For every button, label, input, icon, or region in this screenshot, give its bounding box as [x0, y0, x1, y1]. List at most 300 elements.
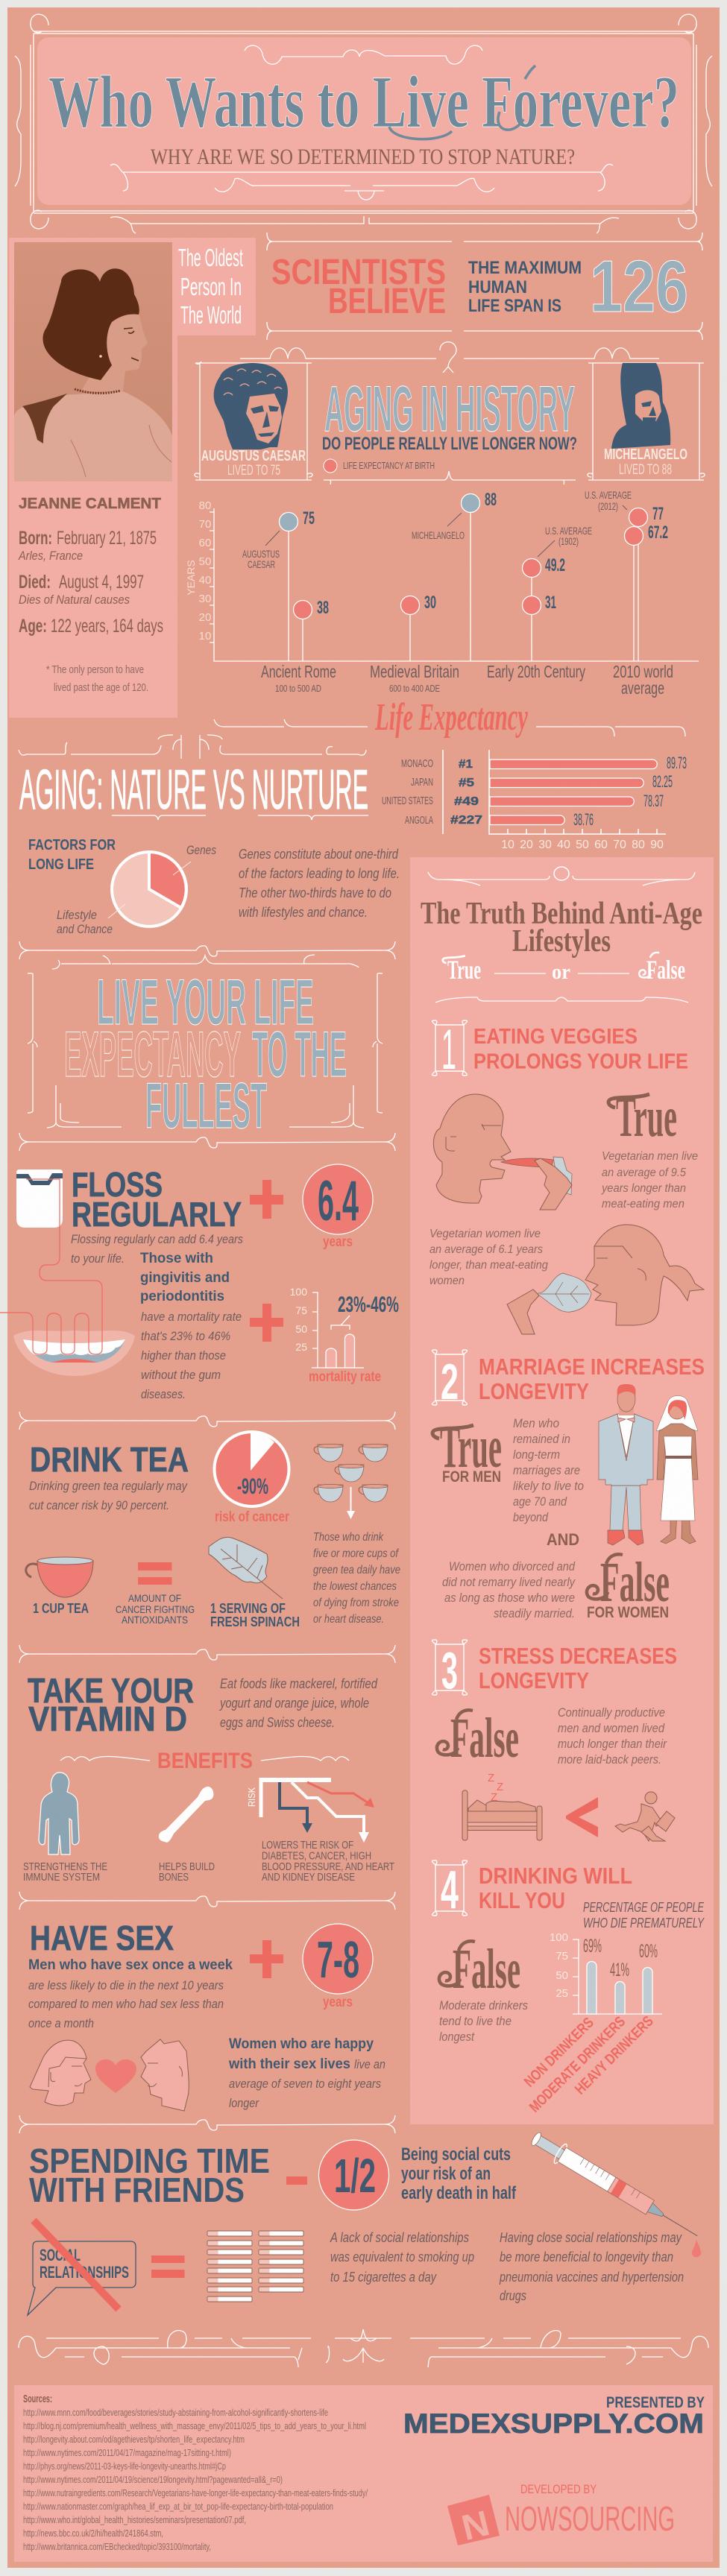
panel: spending time with friends: Being social cuts [401, 2144, 511, 2165]
chart: life expectancy by country: 78.37 [643, 792, 664, 810]
heading: aging in history: DO PEOPLE REALLY LIVE LONGER NOW? [322, 434, 577, 454]
years badge: 7-8 [317, 1931, 359, 1989]
less-than icon [566, 1797, 598, 1837]
claim 1: an average of 9.5 [602, 1167, 686, 1179]
panel: drink tea: DRINK TEA [30, 1440, 189, 1479]
panel: vitamin D: DIABETES, CANCER, HIGH [262, 1850, 371, 1862]
panel: vitamin D: VITAMIN D [28, 1699, 187, 1738]
panel: floss regularly: Those with [140, 1251, 213, 1266]
chart: life expectancy by country: JAPAN [411, 776, 433, 789]
panel: spending time with friends [28, 2128, 703, 2315]
claim 2: FOR WOMEN [587, 1604, 669, 1621]
icon: speech bubble [28, 2220, 136, 2315]
panel: drink tea [26, 1432, 400, 1629]
panel: oldest person [9, 238, 256, 718]
bar chart: drinkers: 69% [583, 1936, 602, 1957]
panel: factors for long life: Lifestyle [57, 908, 97, 922]
panel: drink tea: the lowest chances [313, 1580, 397, 1593]
panel: factors for long life: with lifestyles and chance. [239, 905, 368, 920]
panel: vitamin D: BLOOD PRESSURE, AND HEART [262, 1860, 394, 1873]
legend: LIFE EXPECTANCY AT BIRTH [343, 460, 435, 471]
equals [151, 2255, 185, 2278]
credits: DEVELOPED BY [520, 2482, 597, 2496]
panel: factors for long life: of the factors leading to long life. [239, 866, 400, 881]
panel: Augustus Caesar: LIVED TO 75 [227, 463, 280, 479]
panel: floss regularly: FLOSS [72, 1165, 163, 1204]
panel: drink tea: ANTIOXIDANTS [122, 1614, 188, 1626]
icon: sleeping in bed [462, 1772, 542, 1840]
panel: drink tea: AMOUNT OF [128, 1592, 181, 1604]
panel: vitamin D: eggs and Swiss cheese. [220, 1715, 335, 1730]
icon: bone [159, 1787, 213, 1843]
bar chart: drinkers: 25 [556, 1987, 568, 2000]
facts: Age: [19, 616, 47, 637]
panel: vitamin D: TAKE YOUR [28, 1671, 194, 1710]
icon: sleeping in bed: Z [497, 1781, 503, 1793]
panel: spending time with friends: A lack of social relationships [330, 2230, 469, 2245]
facts [18, 496, 163, 694]
verdict: false [437, 1707, 519, 1770]
text: LIVE YOUR LIFE [97, 967, 314, 1038]
heading: or [552, 961, 570, 984]
chart: life expectancy by country: UNITED STATES [382, 795, 433, 807]
verdict: true for men: True [440, 1415, 502, 1480]
caption: The Oldest [178, 244, 243, 271]
icon: woman eating leaf [507, 1225, 704, 1334]
chart: life expectancy lollipops: 30 [199, 593, 211, 605]
panel: Augustus Caesar [195, 362, 312, 480]
bar chart: drinkers [521, 1931, 662, 2116]
source list: http://www.nutraingredients.com/Research/Vegetarians-have-longer-life-expectancy-than-meat-eaters-finds-study/ [23, 2487, 368, 2498]
panel: floss regularly: higher than those [141, 1348, 226, 1363]
panel: scientists believe: HUMAN [468, 277, 527, 297]
chart: life expectancy lollipops: 20 [199, 611, 211, 624]
claim 3: much longer than their [558, 1737, 667, 1751]
claim 2: 2 [441, 1354, 459, 1410]
half badge: 1/2 [334, 2149, 376, 2203]
panel: drink tea: or heart disease. [313, 1613, 384, 1626]
chart: life expectancy by country: 38.76 [573, 810, 594, 829]
panel: floss regularly: Flossing regularly can add 6.4 years [71, 1232, 243, 1246]
source list [23, 2407, 368, 2552]
panel: drink tea: 1 SERVING OF [210, 1601, 286, 1616]
panel: factors for long life: and Chance [57, 922, 113, 936]
panel: have sex: Women who are happy [229, 2036, 374, 2052]
chart: life expectancy lollipops: 38 [317, 598, 329, 618]
panel: have sex: Men who have sex once a week [28, 1957, 233, 1973]
panel: drink tea: of dying from stroke [313, 1597, 399, 1609]
facts: Born: [19, 528, 52, 549]
chart: life expectancy lollipops: 30 [424, 593, 436, 613]
panel: drink tea: 1 CUP TEA [33, 1601, 89, 1616]
mortality chart: mortality rate [309, 1369, 381, 1385]
panel: floss regularly: diseases. [141, 1387, 186, 1401]
chart: life expectancy lollipops: AUGUSTUS [242, 548, 280, 560]
source list: http://news.bbc.co.uk/2/hi/health/241864.stm, [23, 2528, 163, 2539]
bar chart: drinkers: 41% [610, 1960, 629, 1980]
claim 2: LONGEVITY [479, 1378, 589, 1404]
icon: spinach leaf [209, 1537, 283, 1599]
panel: floss regularly: to your life. [71, 1251, 125, 1266]
claim 1: an average of 6.1 years [429, 1243, 543, 1256]
risk chart [246, 1778, 374, 1843]
panel: vitamin D: Eat foods like mackerel, fortified [220, 1676, 378, 1691]
panel: drink tea: FRESH SPINACH [210, 1614, 300, 1629]
chart: life expectancy lollipops: 2010 world [613, 662, 673, 681]
source list: http://www.who.int/global_health_histories/seminars/presentation07.pdf, [23, 2514, 246, 2525]
panel: vitamin D: IMMUNE SYSTEM [23, 1871, 100, 1884]
chart: life expectancy by country: 70 [613, 839, 626, 851]
chart: life expectancy lollipops: 600 to 400 ADE [389, 683, 440, 694]
icon: sleeping in bed: Z [488, 1772, 494, 1784]
claim 1: Vegetarian men live [602, 1150, 698, 1163]
heading: life expectancy: Life Expectancy [374, 696, 529, 739]
claim 3: men and women lived [558, 1721, 664, 1735]
source list: http://www.nationmaster.com/graph/hea_lif_exp_at_bir_tot_pop-life-expectancy-birth-total-population [23, 2501, 333, 2512]
panel: truth behind anti-age lifestyles [410, 857, 714, 2124]
facts: Arles, France [18, 549, 83, 563]
icon: syringe [528, 2128, 703, 2257]
chart: life expectancy lollipops: 50 [199, 555, 211, 568]
credits: N [458, 2504, 494, 2548]
panel: floss regularly: that's 23% to 46% [141, 1329, 230, 1343]
claim 2: steadily married. [494, 1606, 575, 1620]
claim 3: more laid-back peers. [558, 1752, 661, 1767]
panel: have sex: compared to men who had sex less than [28, 1997, 224, 2011]
panel: have sex: are less likely to die in the next 10 years [28, 1978, 224, 1992]
chart: life expectancy lollipops: CAESAR [248, 558, 275, 570]
panel: Michelangelo: MICHELANGELO [604, 446, 687, 463]
claim 1: meat-eating men [602, 1198, 684, 1210]
claim 1: 1 [441, 1018, 456, 1082]
panel: drink tea: cut cancer risk by 90 percent. [29, 1498, 169, 1512]
years badge [303, 1924, 373, 2010]
icon: immune body [39, 1772, 79, 1854]
facts: lived past the age of 120. [54, 681, 148, 694]
chart: life expectancy lollipops: 67.2 [648, 523, 668, 543]
panel: factors for long life: Genes [186, 843, 216, 857]
icon: heart [95, 2059, 136, 2093]
chart: life expectancy by country: 80 [632, 839, 645, 851]
icon: speech bubble: RELATIONSHIPS [40, 2263, 129, 2282]
chart: life expectancy lollipops: 88 [485, 490, 497, 510]
years badge: years [323, 1995, 353, 2010]
benefits heading [60, 1749, 349, 1773]
claim 2: marriages are [513, 1463, 580, 1477]
subtitle: WHY ARE WE SO DETERMINED TO STOP NATURE? [151, 145, 575, 169]
facts: February 21, 1875 [57, 528, 157, 549]
panel: factors for long life: The other two-thirds have to do [239, 886, 391, 900]
chart: life expectancy lollipops [185, 489, 699, 698]
equals [138, 1562, 171, 1585]
source list: http://phys.org/news/2011-03-keys-life-longevity-unearths.html#jCp [23, 2460, 226, 2472]
claim 1: Vegetarian women live [429, 1228, 541, 1240]
panel: have sex: live an [354, 2057, 385, 2071]
bar chart: drinkers: MODERATE DRINKERS [526, 2013, 629, 2116]
icon: businessman running [615, 1792, 675, 1841]
mortality chart: 100 [290, 1286, 307, 1298]
panel: scientists believe: BELIEVE [328, 282, 446, 321]
panel: floss regularly [0, 1164, 399, 1401]
claim 2: long-term [513, 1448, 560, 1462]
panel: drink tea: five or more cups of [313, 1547, 399, 1560]
title panel [15, 14, 712, 233]
claim 4: tend to live the [439, 2014, 512, 2028]
heading: True [447, 955, 481, 985]
chart: life expectancy lollipops: U.S. AVERAGE [585, 489, 632, 501]
heading: False [646, 955, 685, 985]
chart: life expectancy lollipops: (1902) [558, 535, 579, 547]
mortality chart: 50 [295, 1323, 307, 1335]
panel: have sex: average of seven to eight years [229, 2077, 381, 2091]
chart: life expectancy by country: MONACO [401, 757, 433, 770]
chart: life expectancy lollipops: MICHELANGELO [412, 529, 465, 541]
panel: vitamin D: AND KIDNEY DISEASE [262, 1871, 355, 1884]
claim 4: Moderate drinkers [439, 1998, 528, 2012]
credits: MEDEXSUPPLY.COM [403, 2408, 704, 2439]
panel: floss regularly: gingivitis and [140, 1270, 230, 1286]
panel: drink tea: CANCER FIGHTING [116, 1603, 195, 1615]
icon: man profile [141, 2039, 189, 2111]
icon: bride and groom [599, 1384, 698, 1545]
claim 2: beyond [513, 1510, 548, 1524]
panel: vitamin D: STRENGTHENS THE [23, 1860, 107, 1873]
source list: http://longevity.about.com/od/agethieves/tp/shorten_life_expectancy.htm [23, 2434, 245, 2445]
chart: life expectancy lollipops: 70 [199, 518, 211, 531]
panel: floss regularly: have a mortality rate [141, 1310, 242, 1324]
panel: floss regularly: without the gum [141, 1368, 221, 1382]
panel: spending time with friends: drugs [500, 2288, 526, 2303]
panel: spending time with friends: be more beneficial to longevity than [500, 2250, 673, 2264]
chart: life expectancy by country [382, 750, 687, 851]
credits [403, 2394, 705, 2548]
chart: life expectancy by country: #49 [454, 795, 479, 808]
panel: vitamin D: yogurt and orange juice, whole [218, 1696, 369, 1711]
chart: life expectancy by country: 10 [501, 839, 514, 851]
claim 3: STRESS DECREASES [479, 1643, 677, 1669]
panel: Augustus Caesar: AUGUSTUS CAESAR [201, 448, 306, 464]
text: TO THE [252, 1019, 347, 1090]
panel: have sex: HAVE SEX [30, 1919, 174, 1957]
panel: spending time with friends: early death in half [401, 2183, 517, 2203]
chart: life expectancy lollipops: 10 [199, 630, 211, 643]
chart: life expectancy lollipops: Ancient Rome [261, 662, 336, 681]
panel: spending time with friends: to 15 cigarettes a day [330, 2270, 437, 2285]
icon: Michelangelo bust [611, 363, 670, 449]
heading [421, 897, 702, 985]
icon: Augustus bust [214, 363, 288, 449]
panel: Michelangelo [588, 363, 705, 480]
plus icon [250, 1180, 283, 1219]
source list: http://www.nytimes.com/2011/04/17/magazine/mag-17sitting-t.html) [23, 2447, 231, 2458]
panel: have sex: longer [229, 2096, 259, 2110]
panel: scientists believe [267, 233, 702, 340]
icon: five cups [314, 1445, 388, 1502]
half badge [319, 2140, 389, 2210]
panel: spending time with friends: your risk of an [401, 2164, 491, 2184]
chart: life expectancy lollipops: 40 [199, 574, 211, 587]
caption: The World [180, 301, 242, 329]
chart: life expectancy lollipops: 100 to 500 AD [275, 683, 321, 694]
max lifespan number: 126 [590, 245, 688, 327]
claim 1: PROLONGS YOUR LIFE [473, 1049, 688, 1073]
panel: have sex: once a month [28, 2016, 94, 2030]
facts: Dies of Natural causes [19, 593, 130, 607]
panel: floss regularly: REGULARLY [72, 1195, 242, 1234]
icon: man eating carrot [433, 1094, 572, 1210]
mortality chart: 23%-46% [338, 1292, 399, 1317]
claim 1: longer, than meat-eating [429, 1259, 548, 1272]
caption: Person In [180, 273, 242, 300]
claim 2: Men who [513, 1416, 559, 1430]
facts: Died: [19, 572, 51, 593]
caption [178, 244, 243, 329]
claim 4: DRINKING WILL [479, 1863, 632, 1889]
chart: life expectancy lollipops: 31 [545, 593, 556, 613]
pie: risk of cancer [215, 1432, 289, 1525]
chart: life expectancy lollipops: U.S. AVERAGE [545, 525, 592, 537]
panel: sources and credits: Sources: [23, 2393, 52, 2405]
panel: factors for long life: Genes constitute about one-third [239, 847, 399, 862]
source list: http://blog.nj.com/premium/health_wellness_with_massage_envy/2011/02/5_tips_to_add_years_to_your_li.html [23, 2420, 366, 2431]
panel: factors for long life: LONG LIFE [28, 856, 94, 873]
panel: scientists believe: SCIENTISTS [271, 253, 446, 292]
icon: woman profile [30, 2040, 91, 2106]
chart: life expectancy by country: 60 [594, 839, 608, 851]
benefits heading: BENEFITS [157, 1749, 253, 1773]
chart: life expectancy lollipops: 75 [303, 508, 315, 528]
chart: life expectancy lollipops: 60 [199, 537, 211, 549]
panel: spending time with friends: SPENDING TIME [29, 2141, 270, 2180]
source list: http://www.nytimes.com/2011/04/19/science/19longevity.html?pagewanted=all&_r=0) [23, 2474, 283, 2485]
mortality chart [290, 1286, 399, 1385]
claim 3: Continually productive [558, 1705, 665, 1720]
years badge: 6.4 [318, 1169, 359, 1233]
risk chart: RISK [246, 1787, 257, 1807]
heading: nature vs nurture [19, 758, 368, 821]
claim 1: years longer than [601, 1182, 686, 1195]
heading: aging in history [322, 373, 577, 454]
heading: live your life expectancy to the fullest [64, 967, 347, 1142]
verdict: true [608, 1086, 677, 1149]
claim 2: did not remarry lived nearly [442, 1575, 576, 1589]
chart: life expectancy lollipops: (2012) [598, 500, 618, 512]
panel: sources and credits [14, 2385, 713, 2562]
claim 4: KILL YOU [479, 1887, 565, 1913]
legend [324, 459, 435, 473]
panel: have sex [28, 1919, 385, 2111]
claim 4: longest [439, 2030, 475, 2044]
claim 4 [432, 1860, 705, 2116]
claim 2: as long as those who were [444, 1591, 575, 1605]
panel: have sex: with their sex lives [228, 2056, 350, 2072]
pie chart [108, 852, 191, 926]
icon: fifteen cigarettes [207, 2231, 303, 2302]
bar chart: drinkers: NON DRINKERS [521, 2015, 597, 2091]
claim 3: LONGEVITY [479, 1667, 589, 1693]
credits: PRESENTED BY [606, 2394, 705, 2411]
verdict: false for women [587, 1551, 670, 1614]
chart: life expectancy lollipops: 77 [652, 504, 664, 524]
verdict: false for women: False [600, 1551, 670, 1614]
chart: life expectancy by country: ANGOLA [405, 814, 433, 827]
chart: life expectancy by country: 50 [576, 839, 589, 851]
claim 2: remained in [513, 1432, 570, 1446]
chart: life expectancy by country: #5 [459, 777, 474, 789]
icon: sleeping in bed: Z [491, 1791, 497, 1804]
panel: vitamin D: LOWERS THE RISK OF [262, 1839, 353, 1852]
chart: life expectancy lollipops: average [621, 678, 664, 698]
panel: drink tea: green tea daily have [313, 1564, 400, 1576]
panel: drink tea: Those who drink [313, 1531, 384, 1544]
chart: life expectancy lollipops: 49.2 [545, 555, 565, 575]
claim 1 [429, 1018, 704, 1334]
panel: spending time with friends: WITH FRIENDS [29, 2171, 245, 2209]
mortality chart: 75 [295, 1304, 307, 1316]
bar chart: drinkers: 100 [550, 1931, 568, 1944]
chart: life expectancy by country: 90 [650, 839, 664, 851]
panel: vitamin D: HELPS BUILD [159, 1860, 215, 1873]
chart: life expectancy by country: #227 [450, 814, 482, 827]
mortality chart: 25 [295, 1341, 307, 1353]
panel: scientists believe: THE MAXIMUM [468, 258, 582, 278]
text: 89.73 [667, 754, 687, 772]
panel: spending time with friends: was equivalent to smoking up [330, 2250, 474, 2264]
plus icon [250, 1304, 283, 1342]
claim 2 [432, 1350, 705, 1621]
pie: risk of cancer: -90% [237, 1474, 268, 1499]
chart: life expectancy by country: 30 [538, 839, 552, 851]
arrow [347, 1487, 355, 1519]
chart: life expectancy by country: #1 [459, 758, 473, 771]
claim 1: women [429, 1275, 465, 1287]
facts: August 4, 1997 [59, 572, 144, 593]
panel: scientists believe: LIFE SPAN IS [468, 296, 561, 316]
years badge [303, 1164, 373, 1250]
chart: life expectancy by country: 82.25 [652, 772, 673, 791]
verdict: false: False [453, 1938, 520, 2001]
bar chart: drinkers: 60% [639, 1941, 658, 1962]
icon: tea cup [26, 1557, 93, 1597]
icon: speech bubble: SOCIAL [40, 2246, 81, 2264]
chart: life expectancy lollipops: Early 20th Century [487, 662, 585, 681]
source list: http://www.mnn.com/food/beverages/stories/study-abstaining-from-alcohol-significantly-shortens-life [23, 2407, 328, 2418]
chart: life expectancy lollipops: 80 [199, 499, 211, 512]
plus icon [250, 1940, 283, 1978]
panel: floss regularly: periodontitis [140, 1289, 224, 1304]
bar chart: drinkers: HEAVY DRINKERS [572, 2013, 657, 2098]
chart: life expectancy by country: 20 [520, 839, 533, 851]
pie: risk of cancer: risk of cancer [215, 1509, 289, 1525]
panel: vitamin D [23, 1671, 394, 1884]
panel: spending time with friends: Having close social relationships may [500, 2230, 682, 2245]
panel: spending time with friends: pneumonia vaccines and hypertension [499, 2270, 684, 2285]
panel: Michelangelo: LIVED TO 88 [619, 462, 672, 478]
claim 2: likely to live to [513, 1479, 584, 1493]
panel: vitamin D: BONES [159, 1871, 189, 1884]
heading: Lifestyles [512, 924, 611, 959]
heading: live your life expectancy to the fullest: FULLEST [145, 1070, 267, 1142]
bar chart: drinkers: 75 [556, 1950, 568, 1963]
facts: JEANNE CALMENT [19, 496, 161, 512]
minus icon [286, 2176, 307, 2185]
verdict: false: False [450, 1707, 519, 1770]
heading: live your life expectancy to the fullest: EXPECTANCY [64, 1019, 241, 1090]
panel: factors for long life [28, 837, 400, 936]
claim 2: Women who divorced and [449, 1559, 575, 1573]
facts: 122 years, 164 days [51, 616, 163, 637]
panel: drink tea: Drinking green tea regularly may [29, 1479, 188, 1493]
